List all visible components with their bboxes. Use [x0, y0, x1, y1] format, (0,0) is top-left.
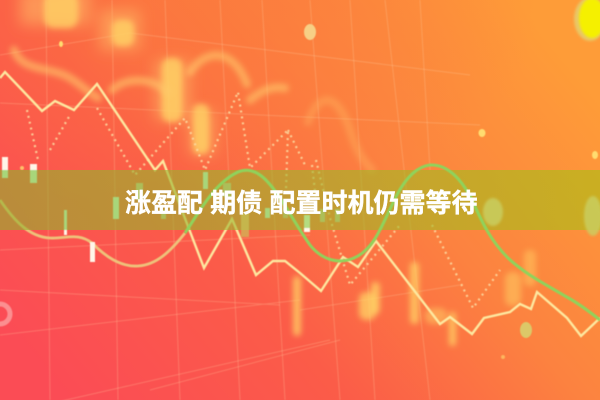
green moving average [185, 165, 600, 320]
yellow price line [0, 72, 600, 336]
candle [304, 215, 310, 232]
candle [2, 157, 8, 178]
pale green oval [520, 322, 532, 338]
candle [113, 197, 119, 219]
candle [335, 209, 340, 222]
candle [203, 172, 208, 189]
blurred background arcs [14, 50, 372, 170]
yellow orb [574, 0, 600, 41]
candle [30, 164, 37, 183]
pale ovals in band [483, 196, 600, 236]
grid lines [0, 0, 480, 400]
dotted line chart [27, 92, 500, 308]
headline: 涨盈配 期债 配置时机仍需等待 [125, 188, 477, 218]
soft halos behind candles [20, 0, 215, 155]
candle [241, 213, 249, 237]
candle [136, 183, 143, 200]
pale dot [304, 24, 316, 40]
pink ring [0, 304, 10, 324]
candle [90, 242, 95, 262]
candle [223, 183, 231, 197]
candle [161, 210, 166, 219]
horizontal band [0, 170, 600, 230]
blurred background candles [44, 0, 536, 346]
candle [320, 209, 325, 222]
small dots [20, 41, 598, 359]
candlesticks [2, 157, 340, 262]
candle [265, 208, 270, 218]
moving average lower tan section [0, 200, 185, 266]
candle [64, 210, 67, 235]
candle [283, 208, 288, 218]
